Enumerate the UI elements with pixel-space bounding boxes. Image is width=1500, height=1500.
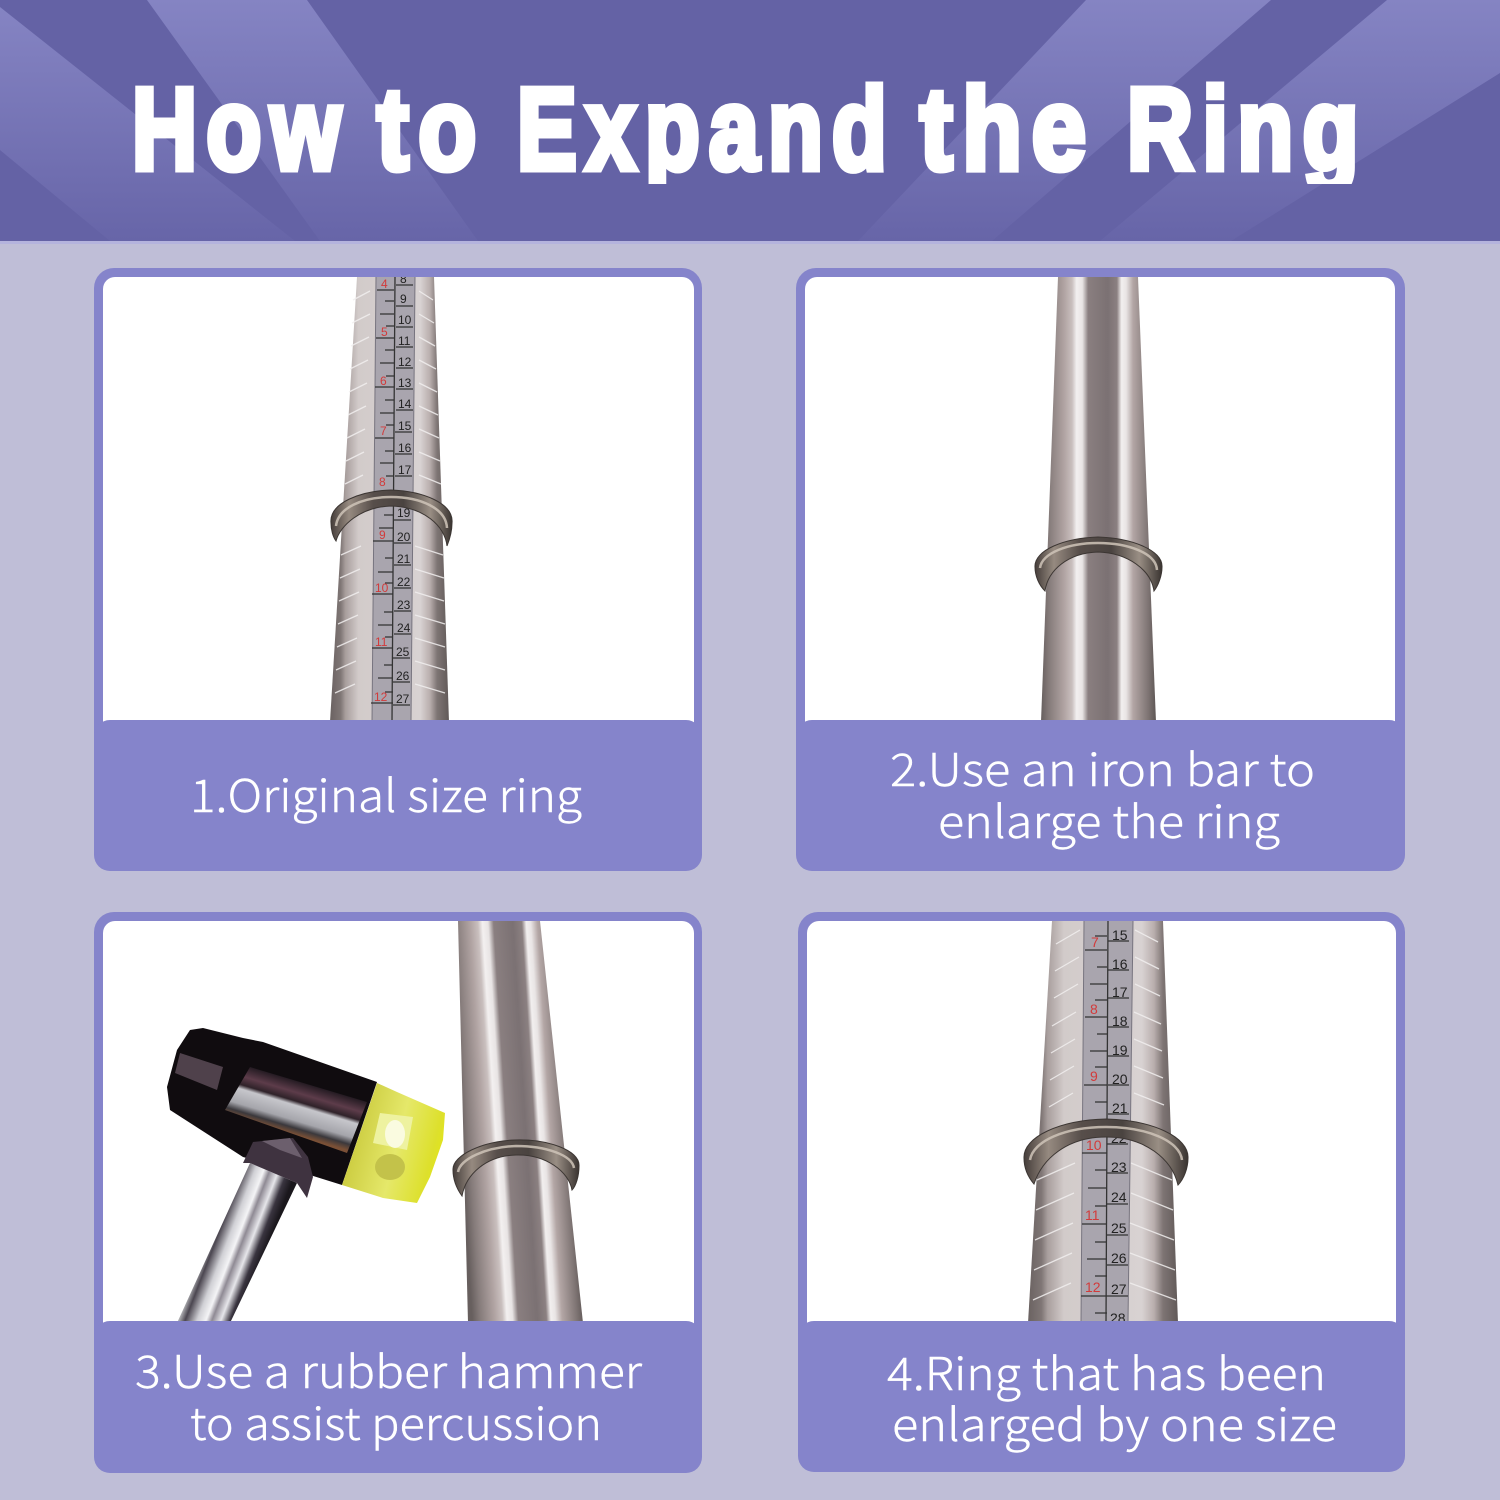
caption: step 4: enlarged by one size [892, 1389, 1337, 1454]
photo: graduated mandrel with original ring: 6 [380, 374, 387, 388]
photo: graduated mandrel with original ring: 5 [381, 325, 388, 339]
title: the [920, 64, 1096, 194]
photo: graduated mandrel with enlarged ring: 24 [1111, 1189, 1127, 1205]
photo: graduated mandrel with enlarged ring: 17 [1112, 984, 1128, 1000]
photo: graduated mandrel with enlarged ring: 23 [1111, 1159, 1127, 1175]
header banner [0, 0, 1500, 244]
hammer head [167, 1028, 445, 1203]
photo: graduated mandrel with original ring: 15 [398, 419, 412, 433]
ring [1035, 537, 1162, 591]
caption: step 3: 3.Use a rubber hammer [135, 1336, 643, 1401]
photo: graduated mandrel with original ring: 10 [398, 313, 412, 327]
photo: graduated mandrel with enlarged ring: 25 [1111, 1220, 1127, 1236]
tilted mandrel [458, 921, 583, 1323]
title: Ring [1127, 64, 1368, 194]
photo: graduated mandrel with original ring: 24 [397, 621, 411, 635]
photo: graduated mandrel with original ring: 11 [398, 334, 411, 348]
caption: step 3 [94, 1321, 702, 1473]
photo: graduated mandrel with original ring: 4 [381, 277, 388, 291]
caption: step 2 [796, 720, 1405, 871]
photo: graduated mandrel with enlarged ring: 10 [1086, 1137, 1102, 1153]
hammer handle [177, 1163, 297, 1323]
caption: step 4 [798, 1321, 1405, 1472]
photo: graduated mandrel with original ring: 25 [396, 645, 410, 659]
photo: graduated mandrel with enlarged ring: 18 [1112, 1013, 1128, 1029]
photo: graduated mandrel with original ring: 12 [398, 355, 412, 369]
photo: graduated mandrel with original ring: 14 [398, 397, 412, 411]
photo: graduated mandrel with original ring: 23 [397, 598, 411, 612]
ring [331, 490, 452, 546]
photo: graduated mandrel with enlarged ring: 11 [1085, 1207, 1100, 1223]
photo: graduated mandrel with enlarged ring: 16 [1112, 956, 1128, 972]
photo: graduated mandrel with original ring: 13 [398, 376, 412, 390]
photo: graduated mandrel with enlarged ring: 8 [1090, 1001, 1098, 1017]
title: Expand [517, 64, 896, 194]
photo: graduated mandrel with enlarged ring: 20 [1112, 1071, 1128, 1087]
panel: step 2 [796, 268, 1405, 871]
photo: mandrel with stretched ring [1035, 277, 1162, 722]
photo: graduated mandrel with original ring: 20 [397, 530, 411, 544]
panel: step 4 [798, 912, 1405, 1472]
caption: step 2: enlarge the ring [938, 786, 1280, 851]
ring [1024, 1119, 1188, 1185]
photo: graduated mandrel with enlarged ring [1024, 921, 1188, 1326]
photo: graduated mandrel with enlarged ring: 15 [1112, 927, 1128, 943]
photo: graduated mandrel with original ring: 17 [398, 463, 412, 477]
photo: graduated mandrel with original ring: 26 [396, 669, 410, 683]
photo: graduated mandrel with original ring: 11 [375, 635, 388, 649]
photo: graduated mandrel with original ring: 21 [397, 552, 411, 566]
photo: graduated mandrel with original ring: 27 [396, 692, 410, 706]
photo: graduated mandrel with original ring [330, 272, 452, 722]
photo: hammer and mandrel [167, 921, 583, 1323]
photo: graduated mandrel with original ring: 22 [397, 575, 411, 589]
photo: graduated mandrel with enlarged ring: 27 [1111, 1281, 1127, 1297]
photo: graduated mandrel with original ring: 8 [400, 272, 407, 286]
caption: step 1: 1.Original size ring [190, 760, 582, 825]
photo: graduated mandrel with original ring: 9 [400, 292, 407, 306]
photo: graduated mandrel with enlarged ring: 22 [1111, 1130, 1127, 1146]
photo: graduated mandrel with original ring: 10 [375, 581, 389, 595]
panel: step 3 [94, 912, 702, 1473]
panel: step 1 [94, 268, 702, 871]
photo: graduated mandrel with enlarged ring: 7 [1091, 934, 1099, 950]
title: How [132, 64, 350, 194]
photo: graduated mandrel with enlarged ring: 9 [1090, 1068, 1098, 1084]
caption: step 1 [94, 720, 702, 871]
ring [453, 1140, 579, 1196]
photo: graduated mandrel with original ring: 8 [379, 475, 386, 489]
title [135, 82, 1356, 184]
photo: graduated mandrel with enlarged ring: 21 [1112, 1100, 1128, 1116]
caption: step 4: 4.Ring that has been [887, 1338, 1326, 1403]
photo: graduated mandrel with original ring: 16 [398, 441, 412, 455]
title: to [377, 64, 486, 194]
photo: graduated mandrel with original ring: 9 [379, 528, 386, 542]
caption: step 2: 2.Use an iron bar to [890, 734, 1315, 799]
caption: step 3: to assist percussion [190, 1388, 602, 1453]
photo: graduated mandrel with enlarged ring: 12 [1085, 1279, 1101, 1295]
photo: graduated mandrel with enlarged ring: 19 [1112, 1042, 1128, 1058]
photo: graduated mandrel with original ring: 19 [397, 506, 411, 520]
photo: graduated mandrel with enlarged ring: 28 [1110, 1310, 1126, 1326]
photo: graduated mandrel with original ring: 12 [374, 690, 388, 704]
photo: graduated mandrel with original ring: 7 [380, 424, 387, 438]
photo: graduated mandrel with enlarged ring: 26 [1111, 1250, 1127, 1266]
